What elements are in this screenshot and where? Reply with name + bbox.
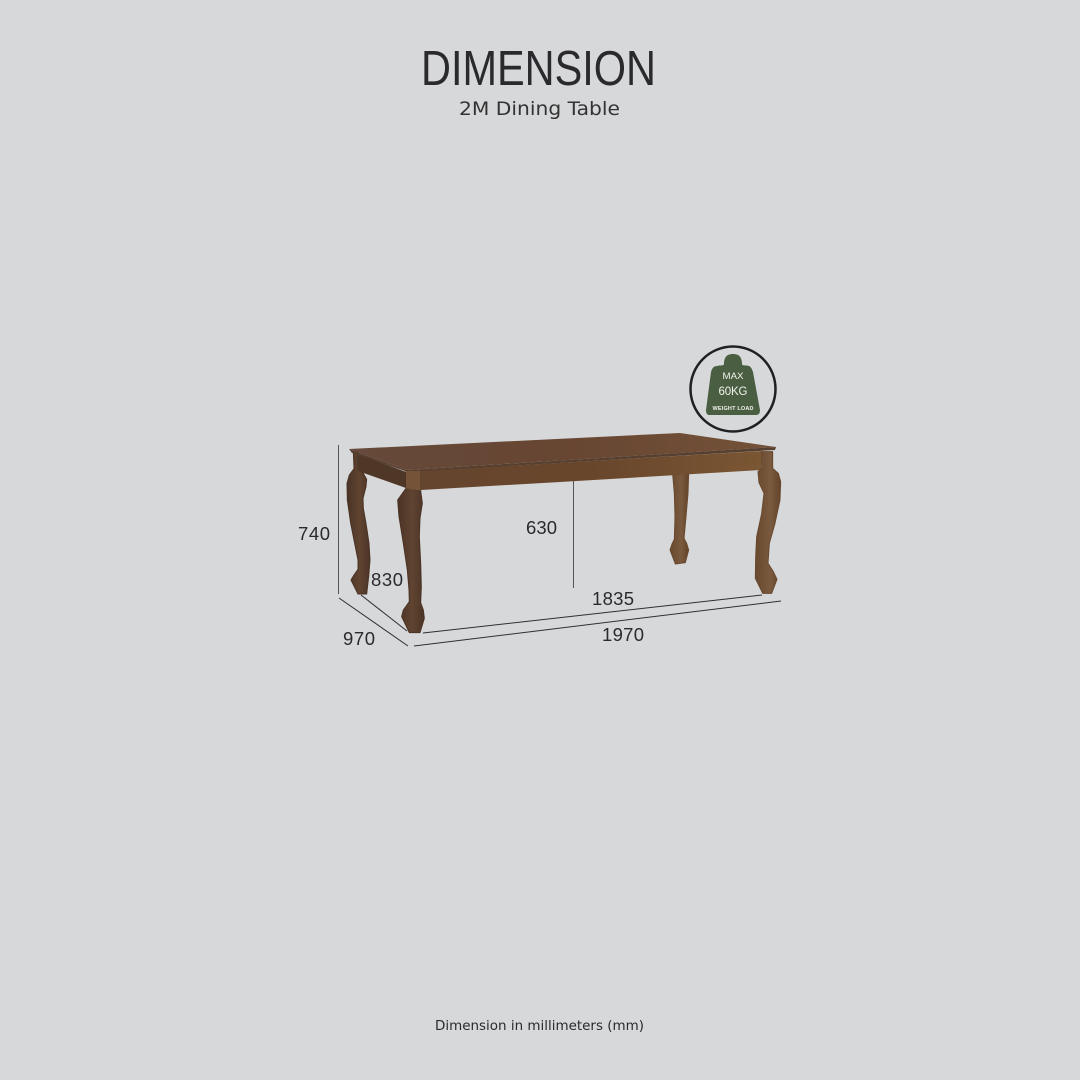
table leg: front left (398, 471, 424, 633)
dimension label: 1835: 1835 (592, 588, 634, 609)
title: DIMENSION (421, 42, 656, 96)
apron: left side (358, 454, 406, 488)
subtitle: 2M Dining Table (459, 98, 620, 120)
dimension label: 740: 740 (298, 523, 330, 544)
badge text: max: MAX (722, 371, 744, 381)
table leg: back right (670, 474, 689, 564)
dimension label: 970: 970 (343, 628, 375, 649)
dimension lines (338, 445, 781, 646)
table top front edge (349, 447, 776, 472)
badge ring (690, 346, 776, 432)
table leg: front right (755, 452, 781, 593)
weight load badge (690, 346, 776, 432)
icon: weight (706, 354, 760, 415)
footnote: Dimension in millimeters (mm) (435, 1019, 644, 1034)
badge text: 60kg: 60KG (718, 386, 748, 398)
table illustration (347, 433, 781, 633)
dimension label: 1970: 1970 (602, 624, 644, 645)
badge text: weight load: WEIGHT LOAD (712, 406, 754, 412)
apron: front (420, 451, 762, 490)
table top surface (349, 433, 776, 470)
dimension label: 830: 830 (371, 569, 403, 590)
table leg: back left (347, 452, 370, 594)
dimension label: 630: 630 (526, 517, 557, 538)
